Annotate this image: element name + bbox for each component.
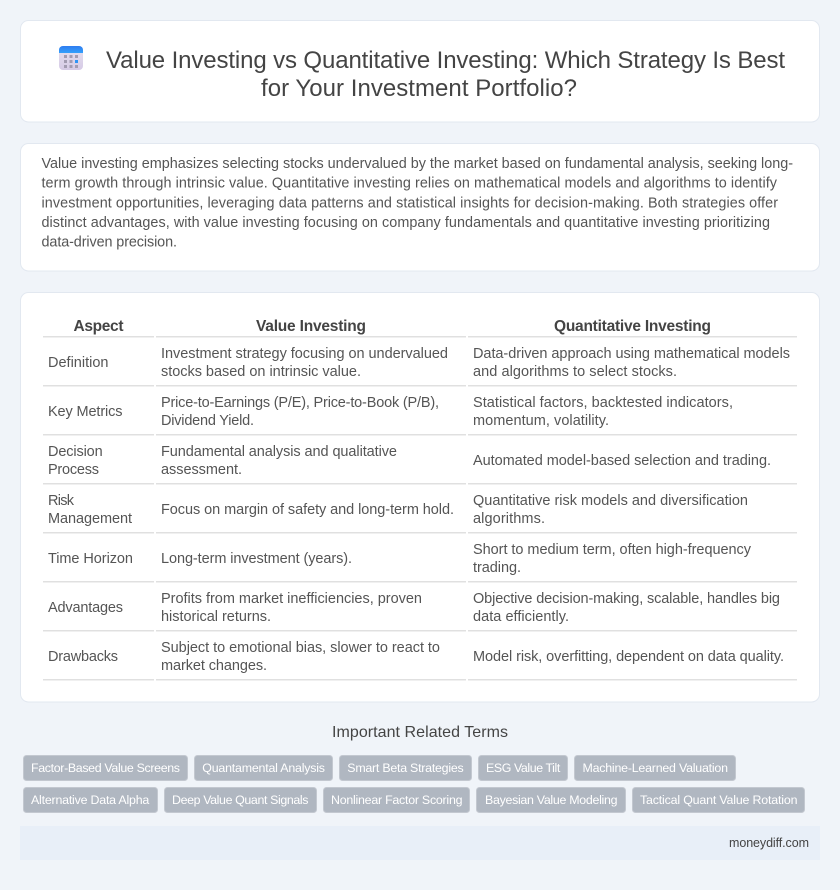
table row: decision process: Fundamental analysis and qualitative — [161, 444, 397, 460]
panel: introduction — [20, 144, 820, 271]
tag list: related terms: Deep Value Quant Signals — [172, 793, 308, 807]
footer: moneydiff.com — [729, 836, 809, 850]
table row: decision process: Decision — [48, 444, 103, 460]
table row: decision process: Automated model-based selection and trading. — [473, 453, 771, 469]
text block: introduction paragraph: Value investing emphasizes selecting stocks undervalued by the market based on fundamental analysis, seeking long- — [42, 156, 793, 172]
table row: advantages: Objective decision-making, scalable, handles big — [473, 591, 780, 607]
tag list: related terms: Machine-Learned Valuation — [582, 761, 728, 775]
tag list: related terms: ESG Value Tilt — [486, 761, 561, 775]
table row: drawbacks: Subject to emotional bias, slower to react to — [161, 640, 440, 656]
tag list: related terms: Tactical Quant Value Rotation — [640, 793, 798, 807]
tag list: related terms — [24, 756, 804, 812]
text block: introduction paragraph — [42, 156, 793, 250]
tag list: related terms: Bayesian Value Modeling — [485, 793, 618, 807]
table row: drawbacks: Model risk, overfitting, dependent on data quality. — [473, 649, 784, 665]
table row: key metrics: Dividend Yield. — [161, 413, 254, 429]
title: for Your Investment Portfolio? — [261, 75, 577, 102]
panel: comparison table — [20, 292, 820, 702]
table row: advantages: historical returns. — [161, 609, 271, 625]
tag list: related terms: Smart Beta Strategies — [347, 761, 464, 775]
footer — [20, 826, 820, 860]
table row: risk management: Quantitative risk models and diversification — [473, 493, 748, 509]
table header row: Aspect — [74, 318, 124, 335]
table row: risk management: Risk — [48, 493, 75, 509]
table row: advantages: Advantages — [48, 600, 123, 616]
panel: page header — [20, 20, 820, 122]
table row: risk management: Focus on margin of safety and long-term hold. — [161, 502, 454, 518]
table row: key metrics: Statistical factors, backtested indicators, — [473, 395, 733, 411]
text block: introduction paragraph: investment opportunities, leveraging data patterns and statistical insights for decision-making. Both strategies offer — [42, 196, 778, 212]
table row: definition: and algorithms to select stocks. — [473, 364, 677, 380]
heading: important related terms: Important Related Terms — [332, 724, 508, 741]
text block: introduction paragraph: data-driven precision. — [42, 234, 177, 250]
tag list: related terms: Alternative Data Alpha — [31, 793, 149, 807]
table header row — [74, 318, 711, 335]
table row: definition: Investment strategy focusing on undervalued — [161, 346, 448, 362]
tag list: related terms: Quantamental Analysis — [202, 761, 325, 775]
table row: key metrics: Key Metrics — [48, 404, 122, 420]
table row: definition — [48, 346, 790, 380]
table row: time horizon: trading. — [473, 560, 521, 576]
icon: calendar — [59, 46, 83, 70]
table row: drawbacks: Drawbacks — [48, 649, 118, 665]
table row: definition: Definition — [48, 355, 108, 371]
table row: time horizon: Short to medium term, often high-frequency — [473, 542, 752, 558]
tag list: related terms: Nonlinear Factor Scoring — [331, 793, 463, 807]
table row: risk management: Management — [48, 511, 132, 527]
table row: key metrics: Price-to-Earnings (P/E), Price-to-Book (P/B), — [161, 395, 439, 411]
table row: key metrics: momentum, volatility. — [473, 413, 609, 429]
table row: decision process — [48, 444, 771, 478]
title: Value Investing vs Quantitative Investing: Which Strategy Is Best — [106, 47, 785, 74]
table header row: Value Investing — [256, 318, 366, 335]
table row: advantages — [48, 591, 780, 625]
tag list: related terms: Factor-Based Value Screens — [31, 761, 180, 775]
table header row: Quantitative Investing — [554, 318, 711, 335]
table row: advantages: Profits from market inefficiencies, proven — [161, 591, 422, 607]
table row: decision process: Process — [48, 462, 99, 478]
table row: risk management — [48, 493, 748, 527]
table row: drawbacks: market changes. — [161, 658, 267, 674]
table row: key metrics — [48, 395, 733, 429]
text block: introduction paragraph: term growth through intrinsic value. Quantitative investing relies on mathematical models and algorithms to identify — [42, 176, 778, 192]
title — [106, 47, 785, 102]
table row: advantages: data efficiently. — [473, 609, 569, 625]
table row: definition: stocks based on intrinsic value. — [161, 364, 361, 380]
table row: definition: Data-driven approach using mathematical models — [473, 346, 790, 362]
table row: time horizon: Time Horizon — [48, 551, 133, 567]
table row: time horizon — [48, 542, 752, 576]
table row: risk management: algorithms. — [473, 511, 545, 527]
text block: introduction paragraph: distinct advantages, with value investing focusing on company fundamentals and quantitative investing prioritizing — [42, 215, 770, 231]
table row: drawbacks — [48, 640, 784, 674]
table row: time horizon: Long-term investment (years). — [161, 551, 352, 567]
table row: decision process: assessment. — [161, 462, 242, 478]
